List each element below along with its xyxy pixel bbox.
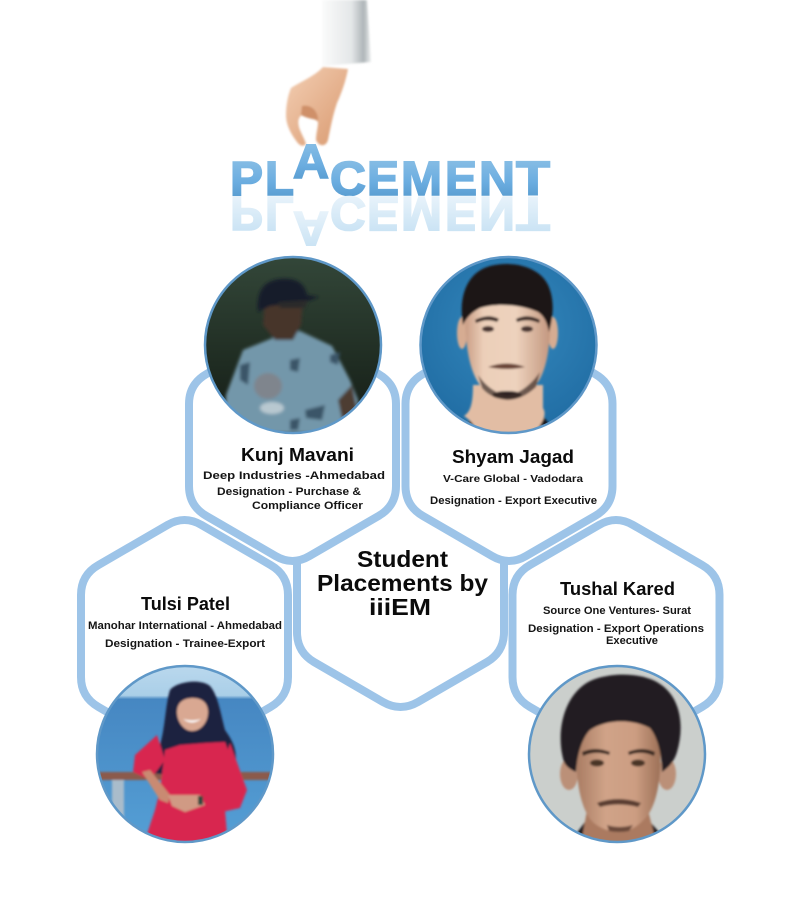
title image: PLACEMENT: N — [479, 153, 515, 206]
photo: Tushal Kared — [524, 662, 710, 848]
text block: Shyam Jagad — [430, 447, 597, 507]
panel: centre hexagon — [297, 540, 504, 707]
text block: Shyam Jagad: V-Care Global - Vadodara — [443, 474, 584, 485]
panel: Shyam Jagad hexagon — [406, 329, 612, 561]
title image: PLACEMENT: N — [479, 186, 515, 239]
text block: Tulsi Patel: Tulsi Patel — [141, 594, 230, 614]
heading: Student Placements by iiiEM: Student — [357, 546, 448, 572]
photo: Shyam Jagad — [415, 252, 605, 438]
text block: Tushal Kared: Executive — [606, 635, 658, 647]
title image: PLACEMENT: C — [330, 153, 366, 206]
text block: Kunj Mavani — [203, 445, 385, 512]
title image: PLACEMENT — [230, 136, 550, 254]
title image: PLACEMENT: E — [367, 186, 399, 239]
heading: Student Placements by iiiEM — [317, 546, 488, 620]
text block: Tushal Kared: Designation - Export Operations — [528, 623, 704, 635]
title image: PLACEMENT: T — [516, 186, 550, 239]
panel: Kunj Mavani hexagon — [189, 329, 396, 561]
text block: Tulsi Patel — [88, 594, 282, 650]
title image: PLACEMENT: E — [445, 153, 477, 206]
text block: Kunj Mavani: Designation - Purchase & — [217, 486, 361, 498]
title image: PLACEMENT: M — [401, 153, 442, 206]
title image: PLACEMENT: L — [265, 186, 294, 239]
title image: PLACEMENT: A — [293, 201, 329, 254]
text block: Tushal Kared: Tushal Kared — [560, 579, 675, 599]
text block: Kunj Mavani: Deep Industries -Ahmedabad — [203, 470, 385, 482]
text block: Tulsi Patel: Designation - Trainee-Export — [105, 638, 265, 650]
heading: Student Placements by iiiEM: iiiEM — [369, 594, 431, 620]
text block: Shyam Jagad: Shyam Jagad — [452, 447, 574, 467]
title image: PLACEMENT: E — [367, 153, 399, 206]
title image: PLACEMENT: C — [330, 186, 366, 239]
photo: Tulsi Patel — [92, 662, 282, 848]
icon: hand holding letter — [286, 0, 371, 146]
title image: PLACEMENT: P — [230, 153, 263, 206]
photo: Kunj Mavani — [200, 252, 390, 438]
text block: Kunj Mavani: Kunj Mavani — [241, 445, 354, 465]
text block: Shyam Jagad: Designation - Export Executive — [430, 495, 597, 507]
title image: PLACEMENT: M — [401, 186, 442, 239]
heading: Student Placements by iiiEM: Placements by — [317, 570, 488, 596]
panel: Tulsi Patel hexagon — [81, 520, 288, 752]
panel: Tushal Kared hexagon — [512, 520, 720, 752]
title image: PLACEMENT: P — [230, 186, 263, 239]
title image: PLACEMENT: A — [293, 136, 329, 189]
title image: PLACEMENT: E — [445, 186, 477, 239]
text block: Tulsi Patel: Manohar International - Ahmedabad — [88, 620, 282, 632]
text block: Tushal Kared — [528, 579, 704, 647]
title image: PLACEMENT: L — [265, 153, 294, 206]
title image: PLACEMENT: T — [516, 153, 550, 206]
text block: Tushal Kared: Source One Ventures- Surat — [543, 605, 691, 617]
text block: Kunj Mavani: Compliance Officer — [252, 500, 364, 512]
